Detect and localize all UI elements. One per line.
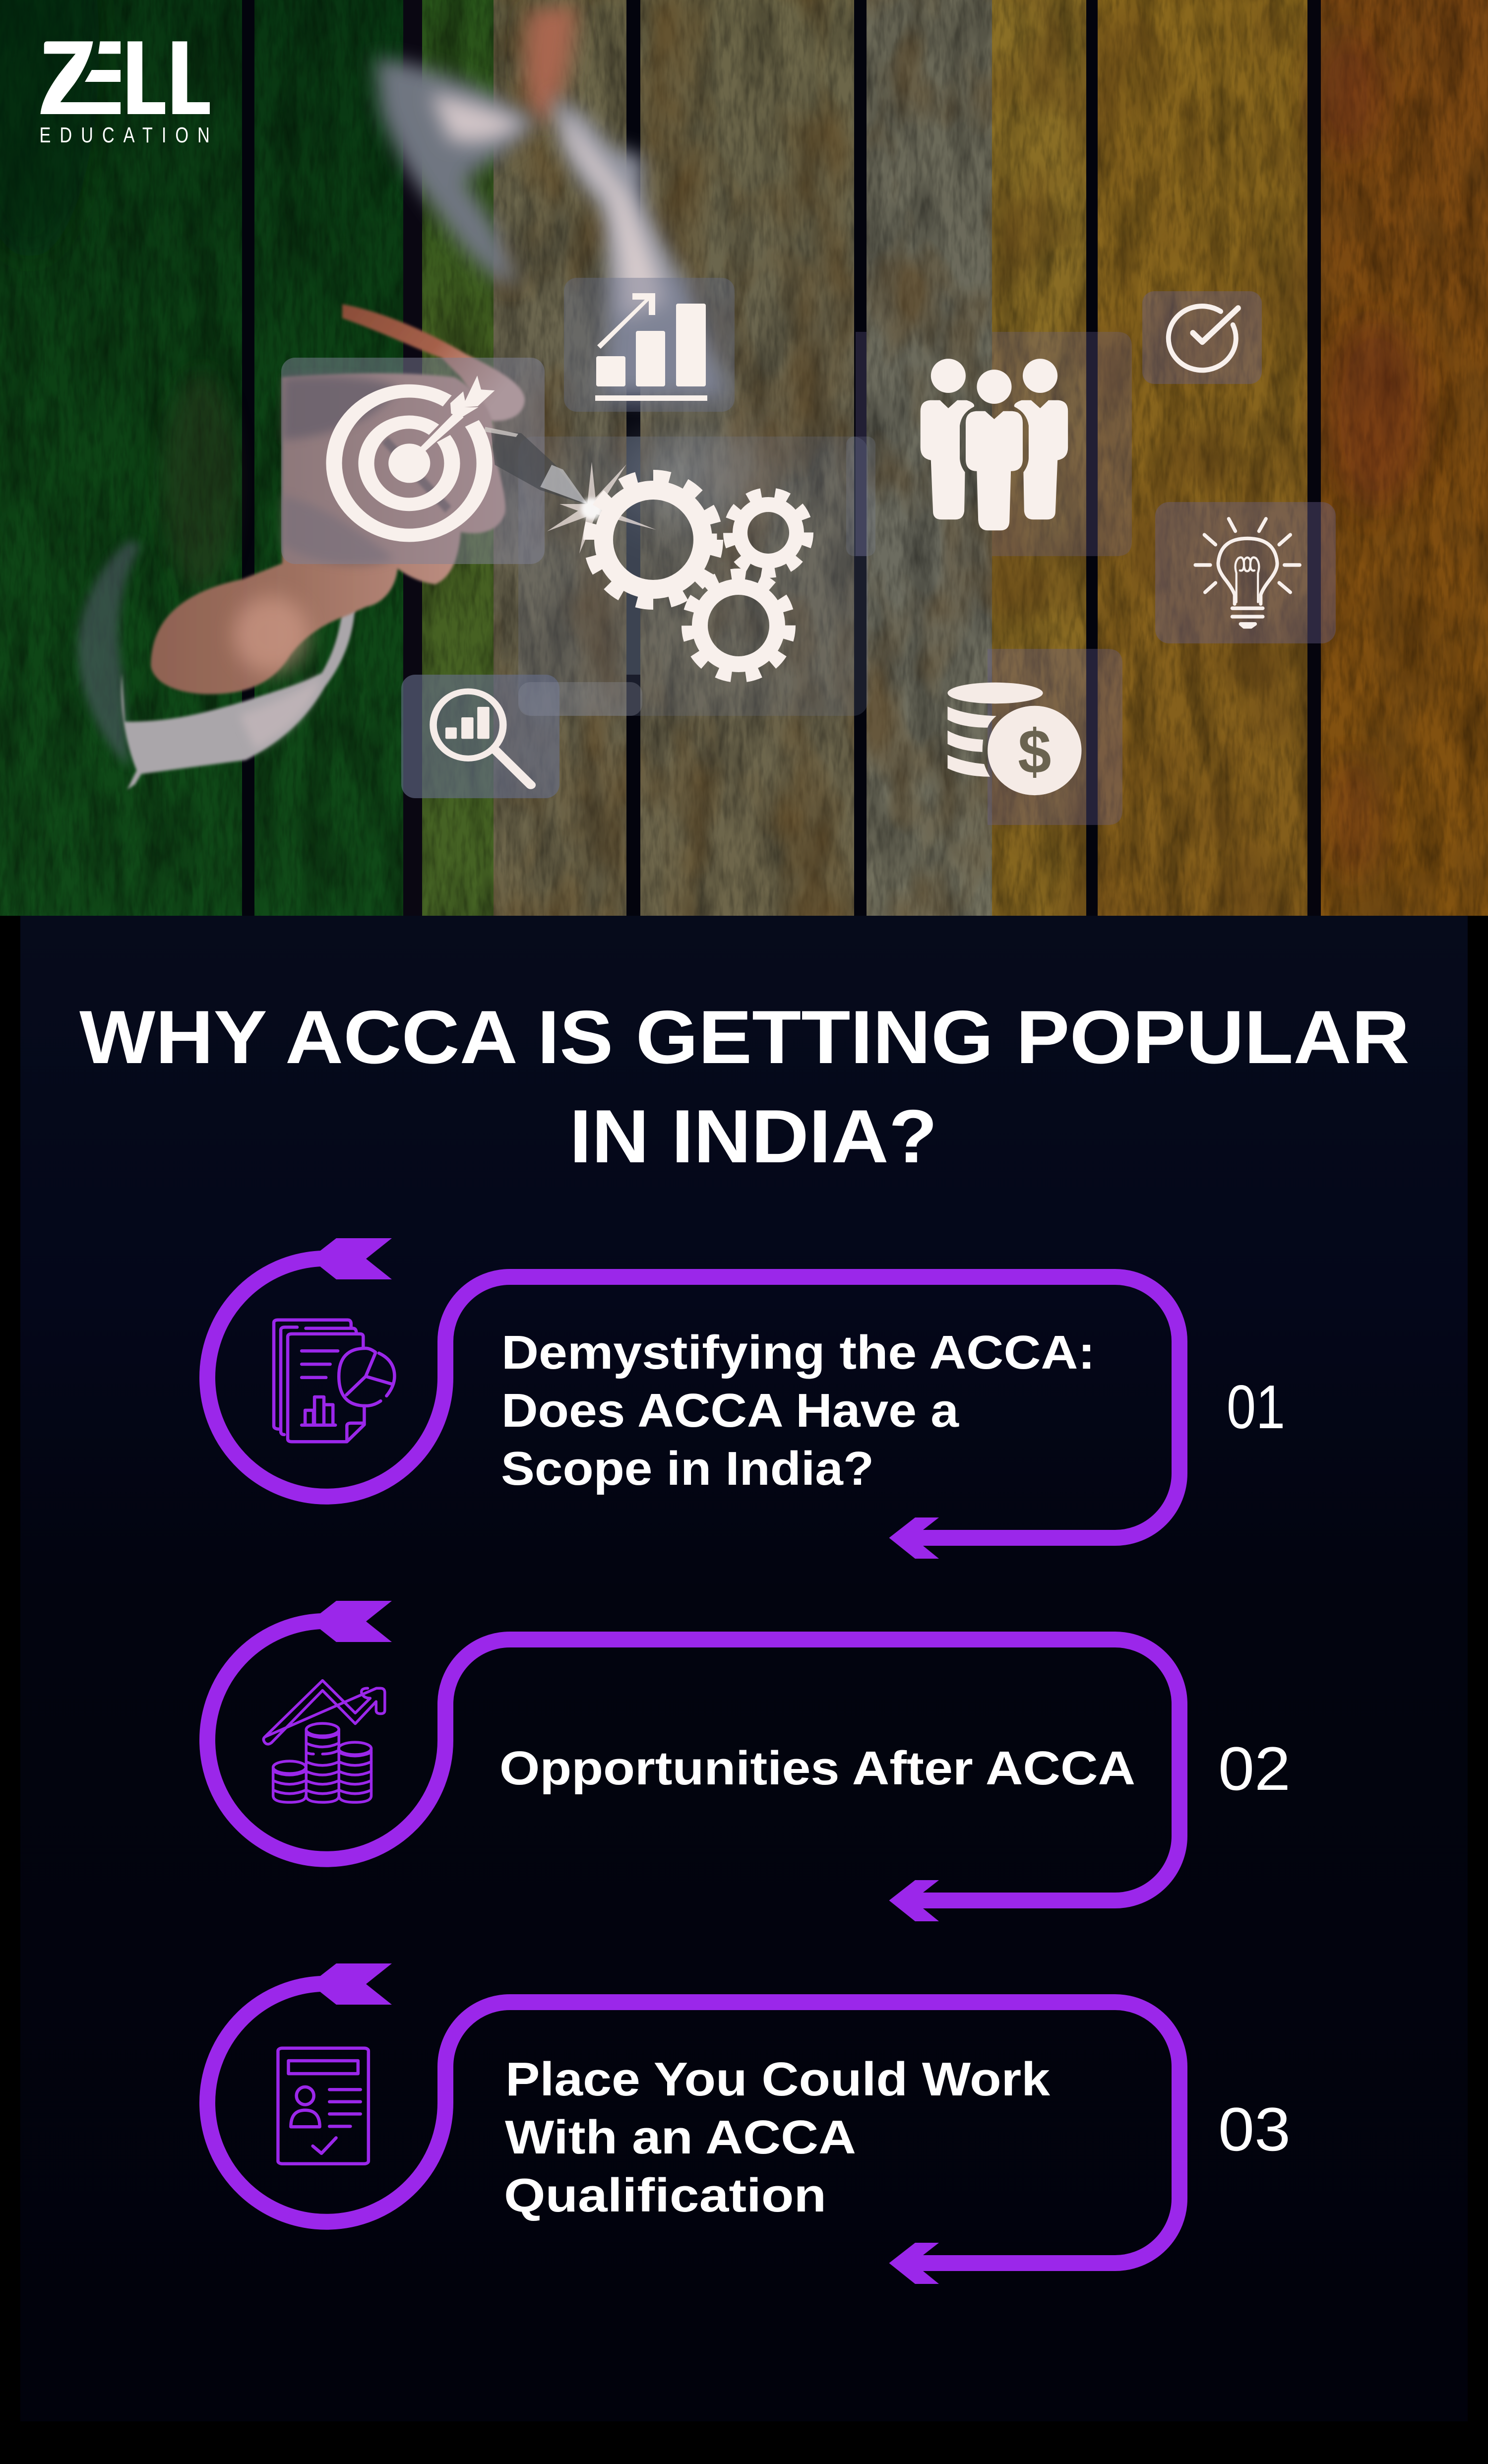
icon: bar chart with arrow xyxy=(595,293,707,401)
light glow over gears xyxy=(620,432,769,521)
blurred necktie xyxy=(375,5,727,397)
glass panel: search xyxy=(401,675,559,798)
glass panel: gear lower overlap xyxy=(518,682,642,716)
glass panel: coins xyxy=(988,649,1122,825)
text: step 3 title: Qualification xyxy=(504,2169,826,2222)
text: step 3 title: With an ACCA xyxy=(505,2111,856,2164)
icon: coins with dollar xyxy=(947,683,1082,795)
hand holding pen xyxy=(151,304,525,694)
text: step 2 title: Opportunities After ACCA xyxy=(499,1742,1135,1795)
logo: Zell Education xyxy=(40,41,210,147)
glass panel: people xyxy=(856,332,1132,556)
text: step 1 title xyxy=(501,1326,1095,1495)
heading xyxy=(79,995,1410,1179)
wood planks in Indian flag colours xyxy=(0,0,1488,916)
icon: growth arrow and coin stacks xyxy=(263,1681,385,1802)
sleeve and cuff xyxy=(78,541,355,790)
text: step 1 title: Demystifying the ACCA: xyxy=(501,1326,1095,1379)
icon: large gear xyxy=(589,476,717,603)
icon: check circle xyxy=(1169,306,1238,370)
panel: dark content background xyxy=(20,916,1468,2421)
heading: IN INDIA? xyxy=(569,1094,937,1179)
text: step 3 title: Place You Could Work xyxy=(505,2053,1051,2106)
pen xyxy=(484,427,588,505)
icon: target with arrow xyxy=(334,376,495,535)
icon: light bulb xyxy=(1195,519,1300,627)
icon: small gear xyxy=(728,493,808,572)
connector loop with arrows xyxy=(207,1963,1179,2284)
glass panel: check xyxy=(1142,291,1262,384)
text: step 3 title xyxy=(504,2053,1051,2222)
pen tip sparkle xyxy=(547,462,656,554)
heading: WHY ACCA IS GETTING POPULAR xyxy=(79,995,1410,1079)
icon: documents and pie chart xyxy=(274,1320,394,1442)
icon: three people xyxy=(921,359,1068,530)
icon: resume checklist xyxy=(278,2048,369,2164)
icon: medium gear xyxy=(687,574,790,677)
number 02: 02 xyxy=(1218,1735,1291,1803)
logo: Zell Education: EDUCATION xyxy=(40,123,210,147)
connector loop with arrows xyxy=(207,1601,1179,1921)
step 3 xyxy=(207,1963,1291,2284)
number 01: 01 xyxy=(1227,1373,1285,1442)
connector loop with arrows xyxy=(207,1238,1179,1559)
glass panel: bulb xyxy=(1155,502,1336,643)
panel: hero photo xyxy=(0,0,1488,916)
text: step 1 title: Does ACCA Have a xyxy=(501,1384,959,1437)
glass panel: target xyxy=(281,358,545,564)
glass panel: chart xyxy=(564,278,735,412)
glass panel: gear xyxy=(518,437,868,716)
step 1 xyxy=(207,1238,1285,1559)
icon: coins with dollar: $ xyxy=(1018,717,1051,787)
glass panel: side strip xyxy=(846,437,875,556)
wood gap seen through gear panel xyxy=(626,437,640,675)
step 2 xyxy=(207,1601,1291,1921)
icon: magnifier with bars xyxy=(433,692,531,785)
text: step 1 title: Scope in India? xyxy=(501,1442,874,1495)
number 03: 03 xyxy=(1218,2095,1291,2164)
